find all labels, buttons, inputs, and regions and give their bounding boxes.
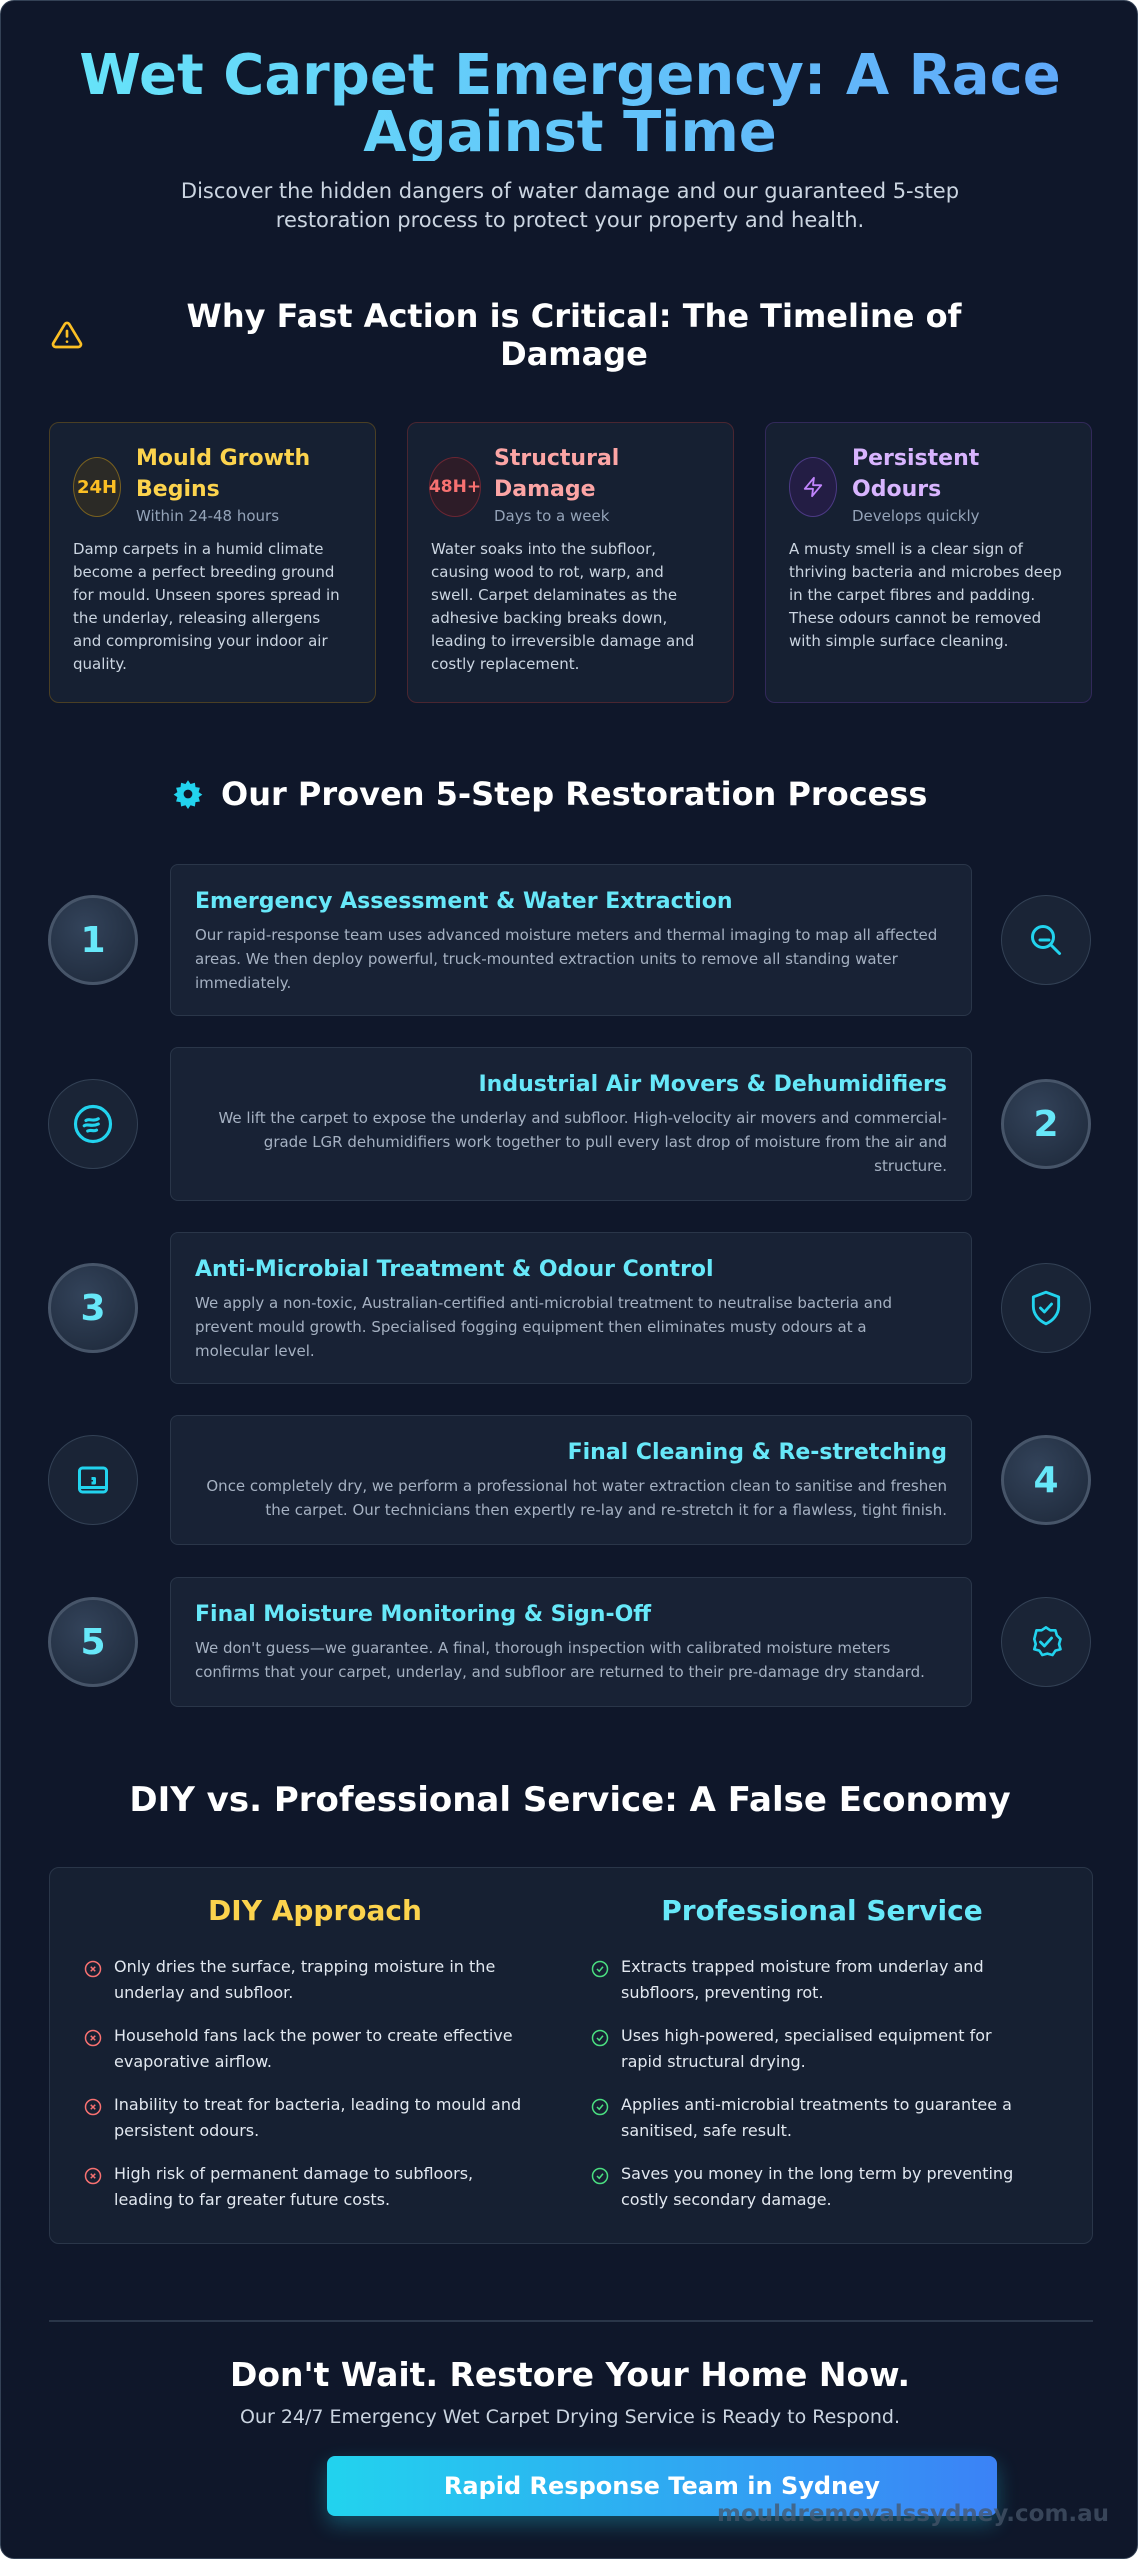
- step 1: [170, 864, 972, 1016]
- step 3: [170, 1232, 972, 1384]
- panel: odours: [765, 422, 1092, 703]
- step 4: Once completely dry, we perform a professional hot water extraction clean to sanitise and freshen the carpet. Our technicians then expertly re-lay and re-stretch it for a flawless, tight finish.: [206, 1477, 947, 1519]
- card title: Odours: [852, 477, 941, 502]
- icon: tablet: [48, 1435, 138, 1525]
- badge 24H: 24H: [77, 476, 117, 498]
- pro items: Extracts trapped moisture from underlay and: [621, 1957, 984, 1976]
- icon: air: [48, 1079, 138, 1169]
- title: Against Time: [363, 100, 777, 165]
- step 5: We don't guess—we guarantee. A final, thorough inspection with calibrated moisture meters confirms that your carpet, underlay, and subfloor are returned to their pre-damage dry standard.: [195, 1639, 925, 1681]
- card title: Damage: [494, 477, 596, 502]
- DIY items: persistent odours.: [114, 2121, 259, 2140]
- number 3: 3: [80, 1288, 106, 1328]
- card title: Persistent: [852, 446, 979, 471]
- panel: odours: in the carpet fibres and padding.: [789, 586, 1035, 604]
- icon: gear: [174, 780, 202, 809]
- badge 48H+: [429, 457, 481, 517]
- DIY items: leading to far greater future costs.: [114, 2190, 390, 2209]
- DIY items: [84, 1957, 521, 2209]
- panel: odours: thriving bacteria and microbes deep: [789, 563, 1062, 581]
- card title: Begins: [136, 477, 220, 502]
- title: Wet Carpet Emergency: A Race: [79, 43, 1061, 108]
- pro items: sanitised, safe result.: [621, 2121, 792, 2140]
- number 5: 5: [80, 1622, 106, 1662]
- step 4: [170, 1415, 972, 1545]
- CTA button: [327, 2456, 997, 2516]
- DIY items: Inability to treat for bacteria, leading to mould and: [114, 2095, 521, 2114]
- panel: structural: Water soaks into the subfloor, causing wood to rot, warp, and swell. Carpet delaminates as the adhesive backing breaks down, leading to irreversible damage and costly replacement.: [431, 540, 694, 673]
- panel: comparison: [49, 1867, 1093, 2244]
- number 2: [1001, 1079, 1091, 1169]
- icon: search: [1001, 895, 1091, 985]
- number 2: 2: [1033, 1104, 1059, 1144]
- step 1: Our rapid-response team uses advanced moisture meters and thermal imaging to map all affected areas. We then deploy powerful, truck-mounted extraction units to remove all standing water immediately.: [195, 926, 937, 992]
- DIY items: Household fans lack the power to create effective: [114, 2026, 513, 2045]
- icon: badge check: [1001, 1597, 1091, 1687]
- icon: shield: [1001, 1263, 1091, 1353]
- step 2: [170, 1047, 972, 1201]
- panel: mould: [49, 422, 376, 703]
- badge 24H: [73, 457, 121, 517]
- CTA button: Rapid Response Team in Sydney: [444, 2472, 880, 2500]
- CTA subtitle: Our 24/7 Emergency Wet Carpet Drying Service is Ready to Respond.: [240, 2406, 900, 2428]
- heading: timeline: Why Fast Action is Critical: The Timeline of Damage: [187, 297, 961, 373]
- panel: odours: Develops quickly: [852, 507, 980, 525]
- step 5: [170, 1577, 972, 1707]
- pro items: costly secondary damage.: [621, 2190, 832, 2209]
- pro items: subfloors, preventing rot.: [621, 1983, 824, 2002]
- number 5: [48, 1597, 138, 1687]
- badge 48H+: 48H+: [429, 477, 481, 497]
- panel: odours: with simple surface cleaning.: [789, 632, 1008, 650]
- panel: structural: Days to a week: [494, 507, 609, 525]
- panel: mould: Within 24-48 hours: [136, 507, 279, 525]
- card title: Mould Growth: [136, 446, 310, 471]
- step 1: Emergency Assessment & Water Extraction: [195, 889, 733, 914]
- subtitle: Discover the hidden dangers of water damage and our guaranteed 5-step restoration process to protect your property and health.: [181, 179, 959, 232]
- DIY items: underlay and subfloor.: [114, 1983, 293, 2002]
- step 4: Final Cleaning & Re-stretching: [568, 1440, 947, 1465]
- heading: DIY vs pro: DIY vs. Professional Service: A False Economy: [129, 1780, 1011, 1820]
- watermark: mouldremovalssydney.com.au: [717, 2501, 1109, 2527]
- step 2: We lift the carpet to expose the underlay and subfloor. High-velocity air movers and commercial-grade LGR dehumidifiers work together to pull every last drop of moisture from the air and structure.: [218, 1109, 947, 1175]
- number 1: [48, 895, 138, 985]
- step 3: Anti-Microbial Treatment & Odour Control: [195, 1257, 714, 1282]
- pro items: Uses high-powered, specialised equipment for: [621, 2026, 992, 2045]
- heading: process: Our Proven 5-Step Restoration Process: [221, 775, 927, 813]
- DIY items: High risk of permanent damage to subfloors,: [114, 2164, 473, 2183]
- panel: odours: These odours cannot be removed: [789, 609, 1041, 627]
- pro items: Applies anti-microbial treatments to guarantee a: [621, 2095, 1012, 2114]
- badge bolt: [789, 457, 837, 517]
- number 4: 4: [1033, 1460, 1059, 1500]
- card title: [852, 446, 979, 502]
- number 1: 1: [80, 920, 106, 960]
- card title: [136, 446, 310, 502]
- DIY items: evaporative airflow.: [114, 2052, 272, 2071]
- step 5: Final Moisture Monitoring & Sign-Off: [195, 1602, 651, 1627]
- step 2: Industrial Air Movers & Dehumidifiers: [478, 1072, 947, 1097]
- pro items: rapid structural drying.: [621, 2052, 806, 2071]
- pro items: [592, 1957, 1013, 2209]
- icon: warning: [52, 322, 82, 348]
- card title: Structural: [494, 446, 619, 471]
- column heading DIY: DIY Approach: [208, 1894, 422, 1927]
- number 3: [48, 1263, 138, 1353]
- title: [1, 47, 1139, 161]
- CTA heading: Don't Wait. Restore Your Home Now.: [230, 2355, 910, 2394]
- DIY items: Only dries the surface, trapping moisture in the: [114, 1957, 495, 1976]
- panel: odours: A musty smell is a clear sign of: [789, 540, 1023, 558]
- column heading pro: Professional Service: [661, 1894, 983, 1927]
- number 4: [1001, 1435, 1091, 1525]
- step 3: We apply a non-toxic, Australian-certified anti-microbial treatment to neutralise bacteria and prevent mould growth. Specialised fogging equipment then eliminates musty odours at a molecular level.: [195, 1294, 892, 1360]
- card title: [494, 446, 619, 502]
- panel: mould: Damp carpets in a humid climate become a perfect breeding ground for mould. Unseen spores spread in the underlay, releasing allergens and compromising your indoor air quality.: [73, 540, 340, 673]
- panel: structural: [407, 422, 734, 703]
- pro items: Saves you money in the long term by preventing: [621, 2164, 1013, 2183]
